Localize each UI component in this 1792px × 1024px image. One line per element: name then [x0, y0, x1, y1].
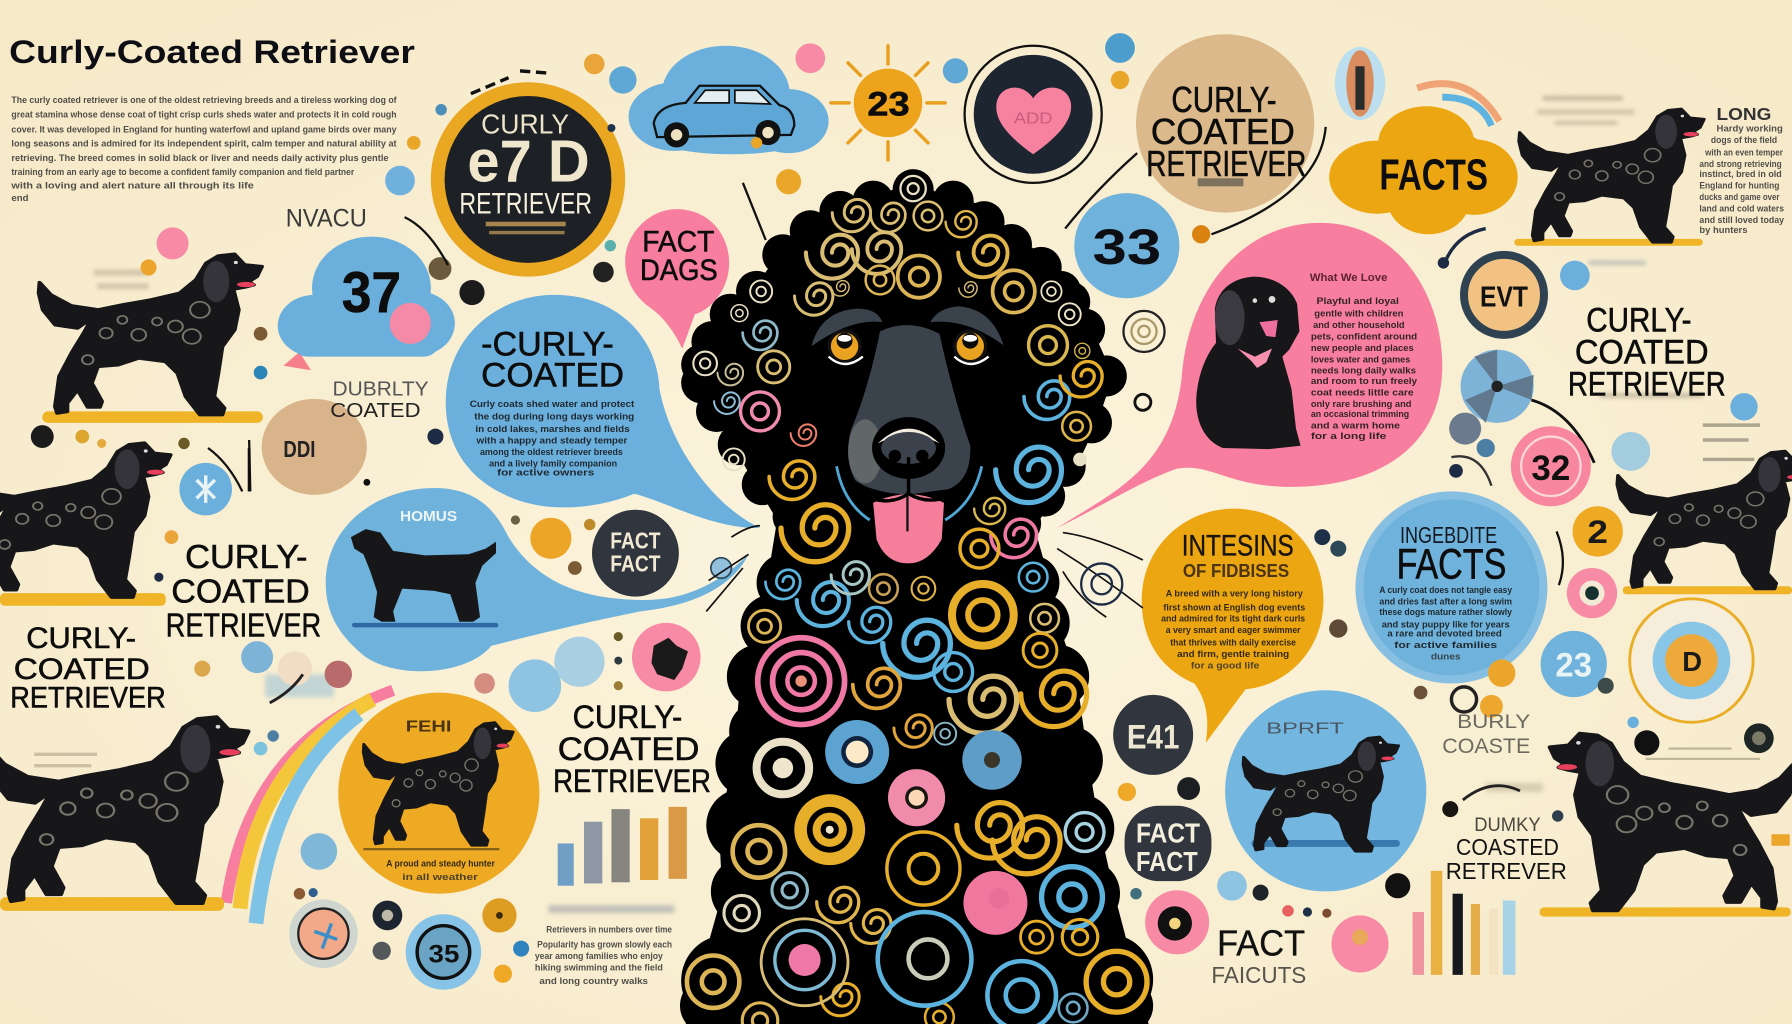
target circle: D — [1682, 646, 1702, 677]
icon: car — [654, 86, 794, 147]
side text top right: by hunters — [1699, 225, 1747, 235]
bubble: gold interesting facts: that thrives with daily exercise — [1170, 638, 1296, 648]
text: curly coated retriever B: CURLY- — [26, 622, 136, 655]
badge: fact fact dark: FACT — [1136, 846, 1198, 877]
intro text block: with a loving and alert nature all through its life — [10, 181, 254, 191]
circle: e41: E41 — [1127, 719, 1179, 757]
bubble: gold interesting facts: INTESINS — [1182, 529, 1294, 562]
text: curly-coated retriever right: RETRIEVER — [1568, 365, 1726, 403]
bubble: gold interesting facts: and firm, gentle training — [1177, 649, 1289, 659]
circle: gold with dog: FEHI — [406, 718, 451, 735]
circle: e41 — [1113, 695, 1193, 775]
badge: curly retriever: RETRIEVER — [459, 188, 592, 221]
bubble: pink with sitting dog: pets, confident around — [1311, 331, 1417, 341]
intro text block: retrieving. The breed comes in solid black or liver and needs daily activity plus gentle — [11, 153, 389, 163]
side text top right: ducks and game over — [1699, 192, 1780, 202]
bar chart left — [558, 807, 687, 886]
badge: evt: EVT — [1480, 281, 1528, 313]
heart circle: ADD — [1014, 110, 1053, 127]
text: curly coated retriever B: COATED — [14, 653, 150, 686]
text: curly coated retriever C: CURLY- — [573, 699, 682, 735]
text: curly coated retriever C: RETRIEVER — [553, 763, 711, 799]
text: fact: FACT — [1217, 922, 1305, 963]
target circle — [1630, 599, 1753, 722]
blob: durly coated: DUBRLTY — [333, 377, 429, 400]
decorative dots upper left — [31, 54, 637, 491]
badge: curly retriever — [431, 82, 625, 277]
dog 4 top right — [1514, 109, 1704, 246]
nose — [872, 417, 945, 479]
badge: curly retriever: e7 D — [467, 128, 590, 195]
bubble: curly coated: among the oldest retriever breeds — [480, 447, 623, 457]
small circles bottom left: 35 — [429, 940, 459, 968]
blue bubbles — [474, 632, 623, 712]
collar lines — [837, 466, 982, 520]
bubble: gold interesting facts: A breed with a very long history — [1166, 589, 1304, 599]
bubble: pink with sitting dog: only rare brushing and — [1311, 399, 1411, 409]
dots left middle — [34, 530, 352, 802]
text: coasted retrever: DUMKY — [1474, 814, 1541, 836]
circle: dog on blue — [1225, 690, 1426, 891]
text block under bar chart: year among families who enjoy — [535, 951, 664, 961]
circle: incredible facts: a rare and devoted breed — [1387, 629, 1502, 639]
scattered marks right middle — [1449, 393, 1760, 486]
circle: incredible facts: INGEBDITE — [1400, 522, 1497, 548]
dog 2 left — [0, 443, 171, 606]
circle: 33 — [1074, 193, 1179, 298]
bubble: pink with sitting dog: needs long daily walks — [1311, 366, 1416, 376]
bubble: gold interesting facts: OF FIDBISES — [1183, 560, 1289, 581]
circle: incredible facts — [1355, 491, 1547, 683]
circle: fact fact — [592, 510, 679, 597]
dots around e41 — [1118, 777, 1563, 918]
bubble: pink with sitting dog: loves water and games — [1311, 354, 1410, 364]
text: burly coaste: COASTE — [1442, 733, 1530, 758]
sun: 23: 23 — [867, 85, 910, 123]
circle: pink donut — [1145, 890, 1209, 954]
bubble: pink with sitting dog: for a long life — [1311, 431, 1386, 441]
text: curly-coated retriever right: CURLY- — [1586, 301, 1691, 339]
bubble: fact dags — [625, 209, 729, 349]
head curls — [693, 176, 1102, 568]
text: curly coated retriever C — [553, 699, 711, 799]
circle: gold with dog: in all weather — [402, 872, 478, 882]
circle: gold with dog — [338, 693, 539, 894]
blob: durly coated: DDI — [283, 436, 315, 462]
badge: curly retriever: CURLY — [481, 109, 569, 140]
dog 6 bottom right — [1539, 734, 1792, 917]
intro text block: great stamina whose dense coat of tight crisp curls sheds water and protects it in cold rough — [11, 110, 397, 120]
bubble: gold interesting facts: for a good life — [1191, 661, 1259, 671]
blob: blue with dog — [326, 488, 749, 671]
scattered dots right lower — [1314, 529, 1790, 840]
sun: 23 — [831, 46, 945, 160]
circle: dog on blue: BPRFT — [1266, 721, 1344, 738]
text: fact: FAICUTS — [1211, 962, 1306, 988]
bubble: pink with sitting dog: gentle with children — [1314, 309, 1404, 319]
blob: durly coated: COATED — [330, 399, 421, 422]
bubble: gold interesting facts: first shown at English dog events — [1163, 602, 1305, 612]
text: burly coaste — [1442, 711, 1530, 758]
text: curly coated retriever B — [10, 622, 166, 714]
icon: dog facing left — [351, 529, 496, 622]
pink puzzle circle — [632, 623, 701, 691]
icons: circle 2 and pink eye — [1557, 506, 1623, 618]
side text top right: and still loved today — [1699, 215, 1785, 225]
text: curly-coated retriever right: COATED — [1575, 333, 1709, 371]
text: curly coated retriever B: RETRIEVER — [10, 681, 166, 714]
balloon and small rainbow — [1335, 47, 1499, 269]
side text top right: land and cold waters — [1699, 203, 1784, 213]
text: coasted retrever: RETREVER — [1446, 858, 1567, 884]
intro text block: The curly coated retriever is one of the oldest retrieving breeds and a tireless working dog of — [11, 95, 397, 105]
rainbow arc — [226, 690, 393, 923]
cloud: facts: FACTS — [1379, 152, 1488, 200]
side text top right: and strong retrieving — [1699, 159, 1782, 169]
pink target — [1331, 915, 1389, 973]
cloud with car — [629, 46, 829, 154]
text: curly coated retriever C: COATED — [558, 731, 699, 767]
bubble: pink with sitting dog: new people and places — [1311, 343, 1414, 353]
text block under bar chart: and long country walks — [539, 976, 648, 986]
text: curly-coated retriever right — [1560, 261, 1726, 403]
bubble: gold interesting facts: and admired for its tight dark curls — [1161, 614, 1305, 624]
heart circle — [965, 46, 1102, 183]
side text top right: Hardy working — [1717, 123, 1783, 133]
intro text block: end — [11, 193, 29, 203]
bubble: curly coated: with a happy and steady temper — [475, 435, 628, 445]
dog 1 standing on yellow ground — [39, 254, 263, 423]
text: fact — [1211, 922, 1306, 988]
gold circle with dots — [511, 515, 731, 578]
bubble: curly coated: Curly coats shed water and protect — [470, 399, 634, 409]
eyes — [827, 329, 862, 363]
cloud: 37: 37 — [342, 261, 401, 325]
icon: sitting dog — [1196, 277, 1301, 449]
bar chart right — [1413, 871, 1515, 975]
leader lines to main dog — [706, 526, 1143, 617]
bubble: pink with sitting dog: and room to run freely — [1311, 376, 1418, 386]
badge: fact fact dark — [1125, 806, 1211, 881]
dog 5 right edge — [1617, 451, 1792, 594]
bubble: curly coated: COATED — [481, 356, 624, 394]
tongue — [873, 494, 944, 563]
bubble: gold interesting facts — [1142, 509, 1323, 743]
blob: durly coated — [262, 377, 429, 495]
side text top right — [1699, 104, 1785, 235]
circle: incredible facts: dunes — [1431, 651, 1461, 661]
bubble: curly coated: the dog during long days working — [474, 411, 634, 421]
circle: 23 blue — [1541, 631, 1607, 697]
text: coasted retrever: COASTED — [1456, 834, 1559, 860]
text block under bar chart: Retrievers in numbers over time — [546, 925, 672, 935]
bubble: pink with sitting dog: Playful and loyal — [1317, 296, 1399, 306]
circle: incredible facts: FACTS — [1397, 540, 1506, 587]
text: burly coaste: BURLY — [1457, 711, 1530, 733]
circle: curly-coated retriever: COATED — [1151, 111, 1295, 152]
bubble: curly coated — [446, 295, 760, 528]
side text top right: dogs of the field — [1711, 135, 1777, 145]
intro text block: long seasons and is admired for its independent spirit, calm temper and natural ability at — [11, 138, 397, 148]
circle: 32 — [1511, 426, 1591, 506]
bubble: curly coated: for active owners — [497, 467, 594, 477]
blob: blue with dog: HOMUS — [400, 509, 457, 525]
text: coasted retrever — [1446, 814, 1567, 884]
circle: fact fact: FACT — [610, 550, 661, 576]
intro text block: training from an early age to become a confident family companion and field partner — [11, 167, 355, 177]
side text top right: England for hunting — [1699, 181, 1779, 191]
faded smudges — [94, 96, 1703, 913]
cloud: 37 — [278, 237, 455, 357]
text: curly coated retriever A — [166, 539, 321, 645]
circle: 32: 32 — [1531, 448, 1570, 488]
cloud: facts — [1329, 106, 1518, 234]
bubble: pink with sitting dog: and a warm home — [1311, 421, 1400, 431]
dog 3 bottom left — [0, 717, 248, 911]
text: curly coated retriever A: CURLY- — [185, 539, 307, 576]
circle: incredible facts: and dries fast after a long swim — [1379, 597, 1512, 607]
text: curly coated retriever A: RETRIEVER — [166, 608, 321, 645]
silhouette — [680, 169, 1153, 1024]
badge: evt — [1464, 255, 1544, 335]
circle: incredible facts: and stay puppy like for years — [1382, 619, 1510, 629]
circle: fact fact: FACT — [610, 528, 661, 554]
icon: blue flower — [1461, 350, 1534, 423]
face — [811, 306, 1003, 563]
bubble: fact dags: FACT — [642, 225, 714, 258]
circle: curly-coated retriever: CURLY- — [1171, 79, 1277, 120]
text block under bar chart: Popularity has grown slowly each — [537, 939, 672, 949]
bubble: curly coated: in cold lakes, marshes and fields — [475, 424, 630, 434]
circle: gold with dog: A proud and steady hunter — [386, 858, 495, 868]
circle: 23 blue: 23 — [1555, 647, 1592, 685]
text: nvacu: NVACU — [286, 204, 367, 232]
intro text block: cover. It was developed in England for hunting waterfowl and upland game birds over many — [11, 125, 397, 135]
bubble: curly coated: -CURLY- — [481, 325, 614, 363]
bubble: pink with sitting dog: What We Love — [1310, 272, 1387, 284]
small circles bottom left — [289, 833, 529, 990]
side text top right: LONG — [1717, 104, 1771, 124]
decorative marks top centre — [743, 33, 1326, 410]
bubble: pink with sitting dog: an occasional trimming — [1311, 409, 1409, 419]
bubble: fact dags: DAGS — [640, 254, 718, 287]
bubble: pink with sitting dog: and other household — [1313, 320, 1405, 330]
bubble: pink with sitting dog: coat needs little care — [1311, 387, 1414, 397]
circle: incredible facts: A curly coat does not tangle easy — [1379, 585, 1513, 595]
circle: incredible facts: these dogs mature rather slowly — [1379, 607, 1513, 617]
main title: Curly-Coated Retriever — [9, 34, 415, 70]
text block under bar chart — [535, 925, 672, 986]
circle: 33: 33 — [1093, 218, 1161, 275]
circle: curly-coated retriever — [1136, 34, 1314, 213]
text block under bar chart: hiking swimming and the field — [535, 962, 663, 972]
bubble: pink with sitting dog — [1057, 223, 1442, 528]
side text top right: with an even temper — [1704, 147, 1783, 157]
circle: incredible facts: for active families — [1394, 640, 1497, 650]
bubble: curly coated: and a lively family companion — [489, 458, 618, 468]
bubble: gold interesting facts: a very smart and eager swimmer — [1166, 625, 1301, 635]
main dog — [680, 169, 1153, 1024]
text: curly coated retriever A: COATED — [171, 573, 310, 610]
icons: circle 2 and pink eye: 2 — [1587, 514, 1608, 550]
side text top right: instinct, bred in old — [1699, 169, 1782, 179]
icon: blue circle with star — [179, 448, 249, 515]
badge: fact fact dark: FACT — [1136, 817, 1200, 848]
intro text block — [10, 95, 397, 203]
body curls — [687, 562, 1147, 1024]
circle: curly-coated retriever: RETRIEVER — [1146, 143, 1306, 184]
